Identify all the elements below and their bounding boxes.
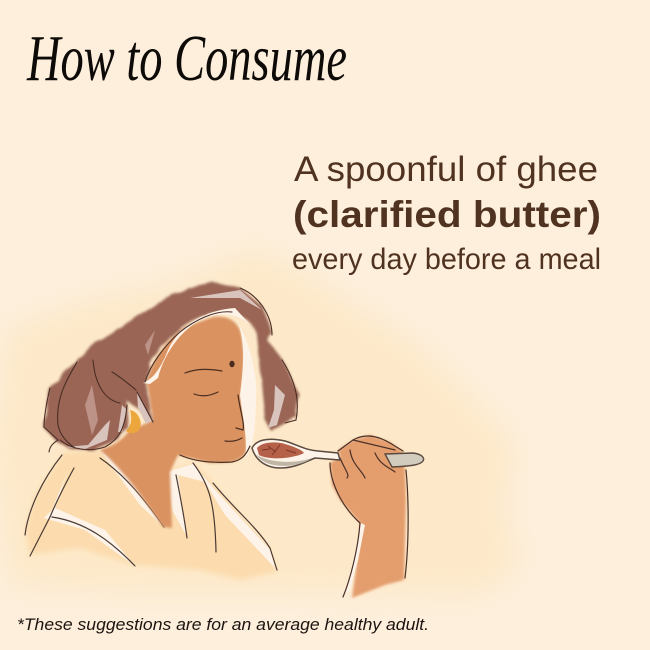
illustration: woman tasting a spoon of ghee: [25, 282, 424, 598]
spoon with ghee: [252, 439, 424, 468]
main message text: [292, 150, 601, 276]
face highlight edge: [238, 322, 256, 458]
eyebrow, eye, mouth and nose lines: [180, 369, 250, 462]
neck and face: [100, 317, 256, 528]
hair: [43, 282, 298, 452]
background watercolor wash: [0, 250, 520, 595]
earring: [126, 410, 141, 433]
spoon handle end: [385, 453, 424, 467]
text line: clarified butter: (clarified butter): [293, 194, 601, 235]
text line: every day before a meal: every day before a meal: [292, 243, 601, 276]
title: How to Consume: [26, 22, 347, 95]
footnote: *These suggestions are for an average healthy adult.: [17, 615, 429, 634]
shirt: [25, 450, 277, 580]
bindi: [229, 361, 235, 367]
hand and forearm: [330, 435, 408, 598]
hair highlights: [143, 308, 255, 384]
hair strands: [44, 288, 297, 452]
text line: A spoonful of ghee: A spoonful of ghee: [294, 150, 598, 189]
